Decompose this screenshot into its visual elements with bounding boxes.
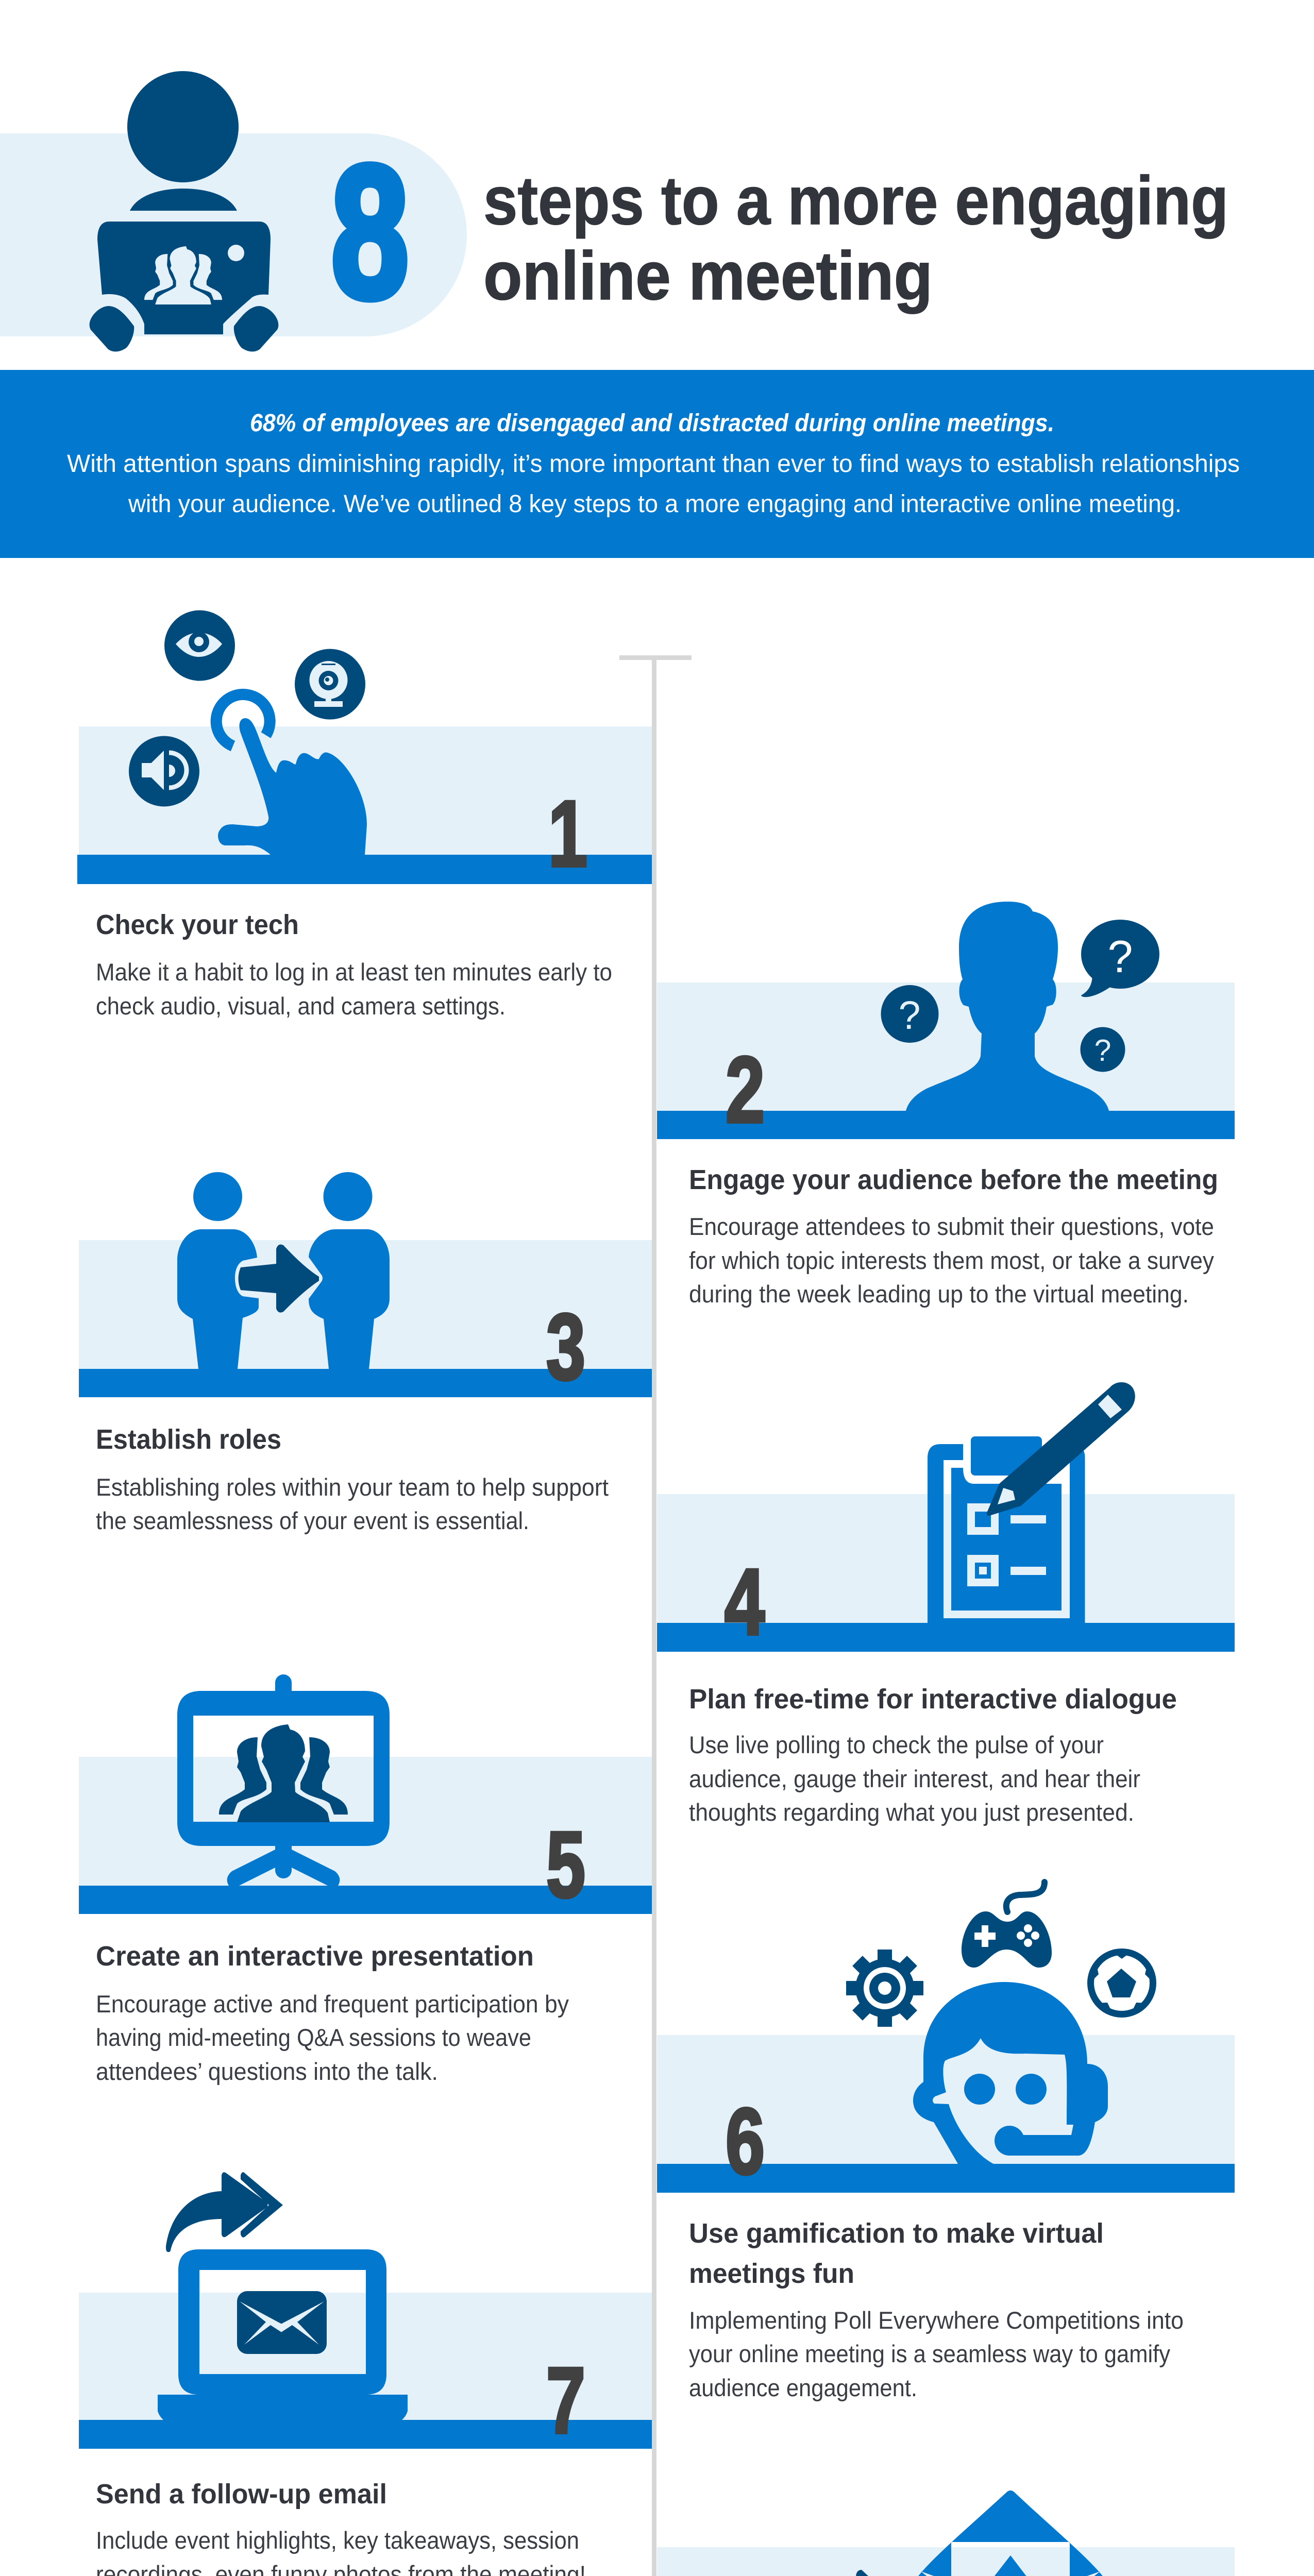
body text <box>689 2307 1184 2401</box>
heading: Check your tech <box>96 909 299 940</box>
heading <box>689 2218 1104 2289</box>
body text <box>96 2527 586 2576</box>
icon: presentation screen <box>177 1674 390 1886</box>
body text: during the week leading up to the virtual meeting. <box>689 1280 1189 1308</box>
heading: Send a follow-up email <box>96 2479 387 2510</box>
header <box>0 71 1228 352</box>
intro band: 68% of employees are disengaged and distracted during online meetings. <box>250 410 1054 437</box>
icon: person silhouette <box>906 902 1109 1111</box>
body text: your online meeting is a seamless way to gamify <box>689 2340 1170 2367</box>
icon: pointing hand <box>218 718 367 855</box>
panel band <box>657 982 1235 1139</box>
step 4 <box>657 1382 1235 1826</box>
step 1 <box>77 610 652 1020</box>
body text: Use live polling to check the pulse of your <box>689 1731 1104 1758</box>
title: online meeting <box>483 238 933 314</box>
number 6: 6 <box>726 2089 765 2194</box>
header pale banner <box>0 133 467 336</box>
icon: forward arrow <box>166 2172 283 2252</box>
step 3 <box>79 1172 652 1534</box>
panel band <box>79 2293 652 2449</box>
icon: pen <box>987 1382 1135 1516</box>
body text <box>689 1213 1214 1308</box>
panel band <box>657 1494 1235 1652</box>
panel band <box>77 726 652 884</box>
big number 8: 8 <box>331 127 409 337</box>
body text <box>689 1731 1140 1826</box>
icon: speech bubble question: ? <box>1108 931 1133 982</box>
intro band: With attention spans diminishing rapidly, it’s more important than ever to find ways to establish relationships <box>67 450 1240 478</box>
step 6 <box>657 1882 1235 2401</box>
panel band <box>79 1757 652 1914</box>
number 1: 1 <box>548 781 587 886</box>
body text: attendees’ questions into the talk. <box>96 2058 438 2085</box>
number 5: 5 <box>546 1812 585 1917</box>
icon: open envelope <box>915 2490 1106 2576</box>
number 2: 2 <box>726 1037 765 1142</box>
body text: audience, gauge their interest, and hear their <box>689 1765 1140 1792</box>
panel band <box>79 1240 652 1397</box>
heading: Use gamification to make virtual <box>689 2218 1104 2249</box>
body text: audience engagement. <box>689 2374 917 2401</box>
title <box>483 163 1228 314</box>
step 7 <box>79 2172 652 2576</box>
number 3: 3 <box>546 1294 585 1399</box>
icon: clipboard checklist <box>928 1436 1085 1623</box>
icon: thumbs up <box>835 2570 902 2576</box>
body text: Establishing roles within your team to help support <box>96 1473 609 1501</box>
body text: for which topic interests them most, or take a survey <box>689 1247 1214 1274</box>
panel band <box>657 2547 1235 2576</box>
heading: Plan free-time for interactive dialogue <box>689 1684 1177 1715</box>
icon: webcam <box>295 649 365 719</box>
heading: Engage your audience before the meeting <box>689 1164 1218 1195</box>
body text: the seamlessness of your event is essential. <box>96 1507 529 1534</box>
icon: question circle right <box>1080 1027 1125 1072</box>
body text: check audio, visual, and camera settings. <box>96 992 506 1020</box>
body text <box>96 1990 569 2085</box>
intro band <box>0 370 1314 558</box>
title: steps to a more engaging <box>483 163 1228 239</box>
icon: two people with arrow <box>177 1172 390 1369</box>
body text: having mid-meeting Q&A sessions to weave <box>96 2024 531 2051</box>
body text: Encourage attendees to submit their questions, vote <box>689 1213 1214 1240</box>
body text <box>96 1473 609 1534</box>
number 7: 7 <box>546 2348 585 2453</box>
step 5 <box>79 1674 652 2085</box>
icon: soccer ball <box>1087 1948 1156 2018</box>
icon: gear <box>846 1950 923 2027</box>
icon: audience people <box>219 1724 348 1822</box>
icon: question circle left: ? <box>899 993 920 1038</box>
icon: eye <box>164 610 235 681</box>
icon: game controller <box>962 1882 1052 1968</box>
icon: speaker <box>129 736 199 807</box>
icon: person with laptop <box>90 71 278 352</box>
body text: Include event highlights, key takeaways, session <box>96 2527 579 2554</box>
body text: thoughts regarding what you just presented. <box>689 1799 1134 1826</box>
body text <box>96 958 612 1020</box>
number 4: 4 <box>725 1549 765 1654</box>
icon: touch ring <box>216 694 270 746</box>
heading: meetings fun <box>689 2258 854 2289</box>
icon: question circle right: ? <box>1094 1033 1111 1067</box>
body text: Implementing Poll Everywhere Competitions into <box>689 2307 1184 2334</box>
heading: Create an interactive presentation <box>96 1941 534 1972</box>
heading: Establish roles <box>96 1424 281 1455</box>
body text: Make it a habit to log in at least ten minutes early to <box>96 958 612 986</box>
icon: envelope <box>237 2291 327 2354</box>
icon: head with headset <box>913 1982 1108 2164</box>
panel band <box>657 2035 1235 2193</box>
icon: question circle left <box>881 985 939 1043</box>
body text: Encourage active and frequent participation by <box>96 1990 569 2018</box>
intro band: with your audience. We’ve outlined 8 key steps to a more engaging and interactive online meeting. <box>128 490 1182 518</box>
timeline line <box>619 655 692 2576</box>
icon: speech bubble question <box>1081 920 1159 997</box>
step 2 <box>657 902 1235 1308</box>
step 8 <box>657 2490 1235 2576</box>
icon: laptop <box>158 2249 408 2420</box>
